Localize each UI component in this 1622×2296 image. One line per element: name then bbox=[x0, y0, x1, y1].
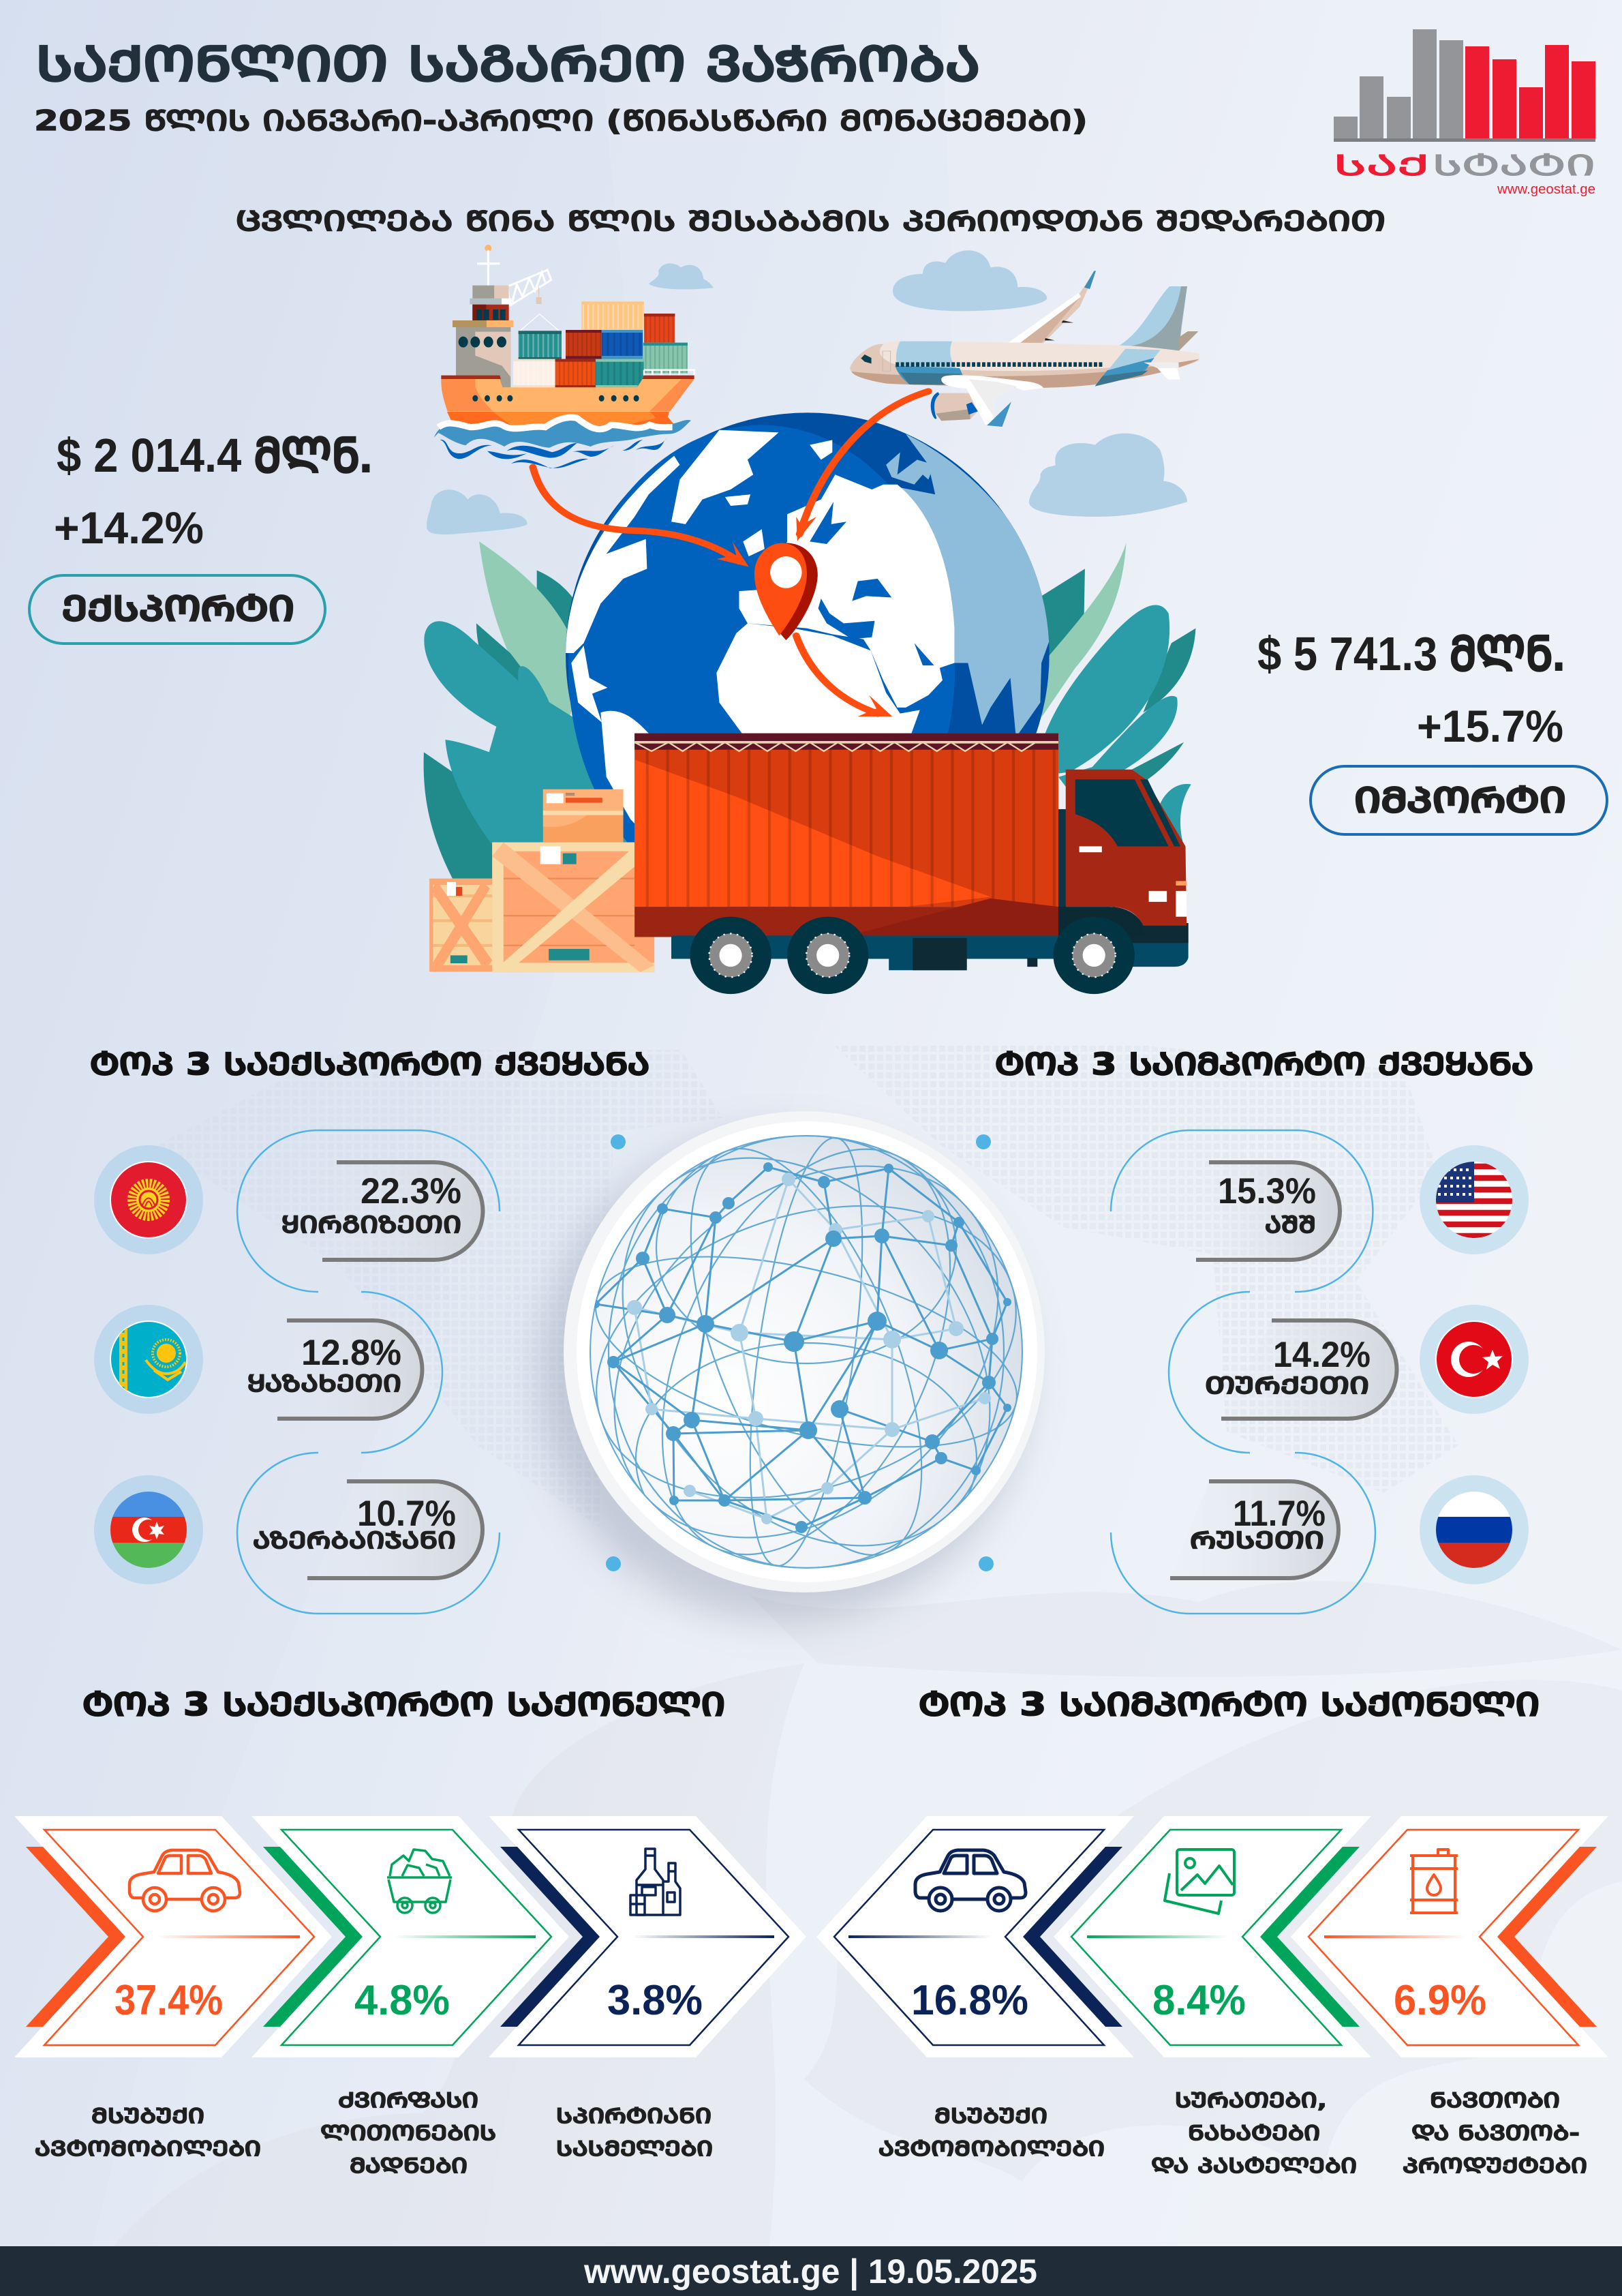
truck chassis bbox=[671, 923, 1189, 970]
icon: car bbox=[915, 1850, 1026, 1911]
location pin bbox=[754, 543, 818, 640]
label: precious metal ores bbox=[320, 2089, 496, 2178]
waves bbox=[434, 417, 691, 468]
flag: Azerbaijan bbox=[94, 1475, 203, 1584]
tail fin bbox=[1119, 286, 1198, 351]
arrow: pin to Africa bbox=[796, 636, 892, 716]
engine bbox=[932, 393, 978, 421]
label: spirits bbox=[556, 2104, 713, 2161]
subtitle: 2025 ᲬᲚᲘᲡ ᲘᲐᲜᲕᲐᲠᲘ-ᲐᲞᲠᲘᲚᲘ (ᲬᲘᲜᲐᲡᲬᲐᲠᲘ ᲛᲝᲜᲐᲪᲔᲛᲔᲑᲘ) bbox=[34, 104, 1088, 137]
footer bbox=[0, 2246, 1622, 2296]
export change: +14.2% bbox=[54, 502, 204, 553]
illustration: airplane bbox=[850, 271, 1199, 427]
heading: top 3 export countries: ᲢᲝᲞ 3 ᲡᲐᲔᲥᲡᲞᲝᲠᲢᲝ ᲥᲕᲔᲧᲐᲜᲐ bbox=[90, 1047, 649, 1082]
label: passenger cars bbox=[878, 2104, 1105, 2161]
mast bbox=[477, 245, 500, 286]
flag: USA bbox=[1420, 1145, 1529, 1254]
label: passenger cars bbox=[35, 2104, 261, 2161]
connector outline bbox=[237, 1130, 500, 1292]
label: pictures, drawings and pastels: ᲜᲐᲮᲐᲢᲔᲑᲘ bbox=[1188, 2121, 1320, 2145]
truck bbox=[634, 734, 1189, 994]
fuselage bbox=[850, 342, 1199, 388]
label: pictures, drawings and pastels: ᲓᲐ ᲞᲐᲡᲢᲔᲚᲔᲑᲘ bbox=[1151, 2154, 1357, 2178]
logo wordmark gray: ᲡᲢᲐᲢᲘ bbox=[1433, 149, 1595, 182]
near wing bbox=[941, 375, 1043, 427]
label: spirits: ᲡᲞᲘᲠᲢᲘᲐᲜᲘ bbox=[556, 2104, 711, 2128]
title: ᲡᲐᲥᲝᲜᲚᲘᲗ ᲡᲐᲒᲐᲠᲔᲝ ᲕᲐᲭᲠᲝᲑᲐ bbox=[36, 36, 980, 92]
label: passenger cars: ᲐᲕᲢᲝᲛᲝᲑᲘᲚᲔᲑᲘ bbox=[35, 2137, 261, 2161]
label: passenger cars: ᲛᲡᲣᲑᲣᲥᲘ bbox=[91, 2104, 204, 2128]
import pill bbox=[1311, 766, 1607, 834]
label: oil and oil products: ᲜᲐᲕᲗᲝᲑᲘ bbox=[1430, 2089, 1560, 2113]
label: pictures, drawings and pastels bbox=[1151, 2089, 1357, 2178]
light-blue land in shade bbox=[898, 434, 1054, 738]
export value: $ 2 014.4 ᲛᲚᲜ. bbox=[57, 429, 372, 482]
country panel: Turkey bbox=[1169, 1292, 1529, 1453]
label: oil and oil products: ᲓᲐ ᲜᲐᲕᲗᲝᲑ- bbox=[1411, 2121, 1580, 2145]
sphere shadow bbox=[538, 1132, 1029, 1622]
share: 16.8% bbox=[911, 1977, 1028, 2024]
chevron: import petroleum bbox=[1291, 1816, 1608, 2057]
heading: top 3 import countries: ᲢᲝᲞ 3 ᲡᲐᲘᲛᲞᲝᲠᲢᲝ ᲥᲕᲔᲧᲐᲜᲐ bbox=[995, 1047, 1533, 1082]
central network sphere bbox=[538, 1085, 1071, 1622]
containers bbox=[513, 301, 694, 387]
arrow: ship to pin bbox=[533, 467, 749, 567]
export pill bbox=[29, 575, 325, 644]
label: oil and oil products: ᲞᲠᲝᲓᲣᲥᲢᲔᲑᲘ bbox=[1403, 2154, 1587, 2178]
label: passenger cars: ᲛᲡᲣᲑᲣᲥᲘ bbox=[934, 2104, 1047, 2128]
country panel: Kazakhstan bbox=[94, 1292, 442, 1453]
label: passenger cars: ᲐᲕᲢᲝᲛᲝᲑᲘᲚᲔᲑᲘ bbox=[878, 2137, 1105, 2161]
logo bars bbox=[1334, 29, 1595, 142]
heading: top 3 import goods: ᲢᲝᲞ 3 ᲡᲐᲘᲛᲞᲝᲠᲢᲝ ᲡᲐᲥᲝᲜᲔᲚᲘ bbox=[919, 1686, 1540, 1723]
flag: Kazakhstan bbox=[94, 1305, 203, 1414]
label: spirits: ᲡᲐᲡᲛᲔᲚᲔᲑᲘ bbox=[556, 2137, 713, 2161]
country name: ᲧᲘᲠᲒᲘᲖᲔᲗᲘ bbox=[281, 1211, 461, 1239]
decorative dots bbox=[606, 1134, 994, 1571]
label: precious metal ores: ᲚᲘᲗᲝᲜᲔᲑᲘᲡ bbox=[320, 2121, 496, 2145]
country name: ᲐᲖᲔᲠᲑᲐᲘᲯᲐᲜᲘ bbox=[253, 1527, 456, 1554]
icon: oil barrel bbox=[1410, 1849, 1458, 1913]
icon: picture frames bbox=[1165, 1849, 1234, 1914]
share: 11.7% bbox=[1233, 1494, 1326, 1534]
truck cab bbox=[1058, 770, 1187, 935]
arrow: plane to pin bbox=[796, 391, 928, 541]
share: 15.3% bbox=[1218, 1171, 1316, 1211]
import value: $ 5 741.3 ᲛᲚᲜ. bbox=[1257, 627, 1565, 680]
section subtitle: ᲪᲕᲚᲘᲚᲔᲑᲐ ᲬᲘᲜᲐ ᲬᲚᲘᲡ ᲨᲔᲡᲐᲑᲐᲛᲘᲡ ᲞᲔᲠᲘᲝᲓᲗᲐᲜ ᲨᲔᲓᲐᲠᲔᲑᲘᲗ bbox=[236, 206, 1386, 237]
far wing bbox=[1008, 271, 1096, 343]
value block bbox=[1221, 1320, 1397, 1419]
connector outline bbox=[1169, 1292, 1250, 1453]
crane bbox=[508, 270, 559, 331]
chevron: export ores bbox=[251, 1816, 569, 2057]
icon: ore cart bbox=[387, 1849, 452, 1913]
seas bbox=[818, 579, 891, 639]
land white bbox=[671, 430, 779, 524]
truck wheels bbox=[690, 917, 1135, 994]
country panel: Azerbaijan bbox=[94, 1453, 500, 1614]
leaves bbox=[424, 541, 1195, 881]
value block bbox=[322, 1162, 483, 1260]
icon: bottles bbox=[630, 1849, 680, 1915]
country name: ᲗᲣᲠᲥᲔᲗᲘ bbox=[1205, 1372, 1369, 1400]
big crate bbox=[492, 843, 654, 972]
country name: ᲐᲨᲨ bbox=[1265, 1211, 1316, 1239]
chevron: export cars bbox=[14, 1816, 332, 2057]
small crate bbox=[429, 879, 492, 971]
country name: ᲠᲣᲡᲔᲗᲘ bbox=[1190, 1527, 1324, 1554]
label: oil and oil products bbox=[1403, 2089, 1587, 2178]
connector outline bbox=[1111, 1130, 1373, 1292]
share: 12.8% bbox=[301, 1333, 401, 1373]
share: 10.7% bbox=[357, 1494, 456, 1534]
value block bbox=[1196, 1162, 1340, 1260]
share: 14.2% bbox=[1273, 1335, 1371, 1375]
footer: www.geostat.ge | 19.05.2025 bbox=[583, 2252, 1037, 2291]
truck container bbox=[634, 734, 1058, 937]
chevron: import pictures bbox=[1054, 1816, 1371, 2057]
connector outline bbox=[361, 1292, 442, 1453]
connector outline bbox=[237, 1453, 500, 1614]
chevron: export spirits bbox=[489, 1816, 806, 2057]
import pill: ᲘᲛᲞᲝᲠᲢᲘ bbox=[1354, 781, 1566, 820]
globe bbox=[566, 412, 1054, 911]
share: 37.4% bbox=[114, 1977, 223, 2024]
share: 3.8% bbox=[607, 1977, 703, 2024]
value block bbox=[307, 1481, 483, 1578]
illustration: globe, ship, plane, truck bbox=[424, 250, 1195, 994]
export pill: ᲔᲥᲡᲞᲝᲠᲢᲘ bbox=[62, 589, 294, 629]
country panel: Russia bbox=[1111, 1453, 1529, 1614]
hull bbox=[441, 376, 694, 427]
sphere network bbox=[590, 1135, 1023, 1569]
value block bbox=[277, 1320, 423, 1419]
label: precious metal ores: ᲫᲕᲘᲠᲤᲐᲡᲘ bbox=[338, 2089, 478, 2113]
logo wordmark red: ᲡᲐᲥ bbox=[1334, 149, 1429, 182]
flag: Russia bbox=[1420, 1475, 1529, 1584]
heading: top 3 export goods: ᲢᲝᲞ 3 ᲡᲐᲔᲥᲡᲞᲝᲠᲢᲝ ᲡᲐᲥᲝᲜᲔᲚᲘ bbox=[82, 1686, 725, 1723]
share: 6.9% bbox=[1394, 1977, 1486, 2024]
value block bbox=[1170, 1481, 1338, 1578]
share: 4.8% bbox=[354, 1977, 450, 2024]
logo: Geostat bbox=[1334, 29, 1595, 197]
label: precious metal ores: ᲛᲐᲓᲜᲔᲑᲘ bbox=[350, 2154, 468, 2178]
share: 22.3% bbox=[361, 1171, 461, 1211]
import change: +15.7% bbox=[1417, 701, 1563, 751]
country panel: USA bbox=[1111, 1130, 1529, 1292]
logo url: www.geostat.ge bbox=[1497, 182, 1595, 197]
flag: Turkey bbox=[1420, 1305, 1529, 1414]
arrows bbox=[533, 391, 928, 716]
illustration: cargo ship bbox=[434, 245, 694, 468]
sphere body bbox=[590, 1135, 1023, 1569]
box bbox=[543, 789, 624, 843]
superstructure bbox=[453, 286, 513, 387]
connector outline bbox=[1111, 1453, 1375, 1614]
crates bbox=[429, 789, 654, 972]
flag: Kyrgyzstan bbox=[94, 1145, 203, 1254]
share: 8.4% bbox=[1152, 1977, 1246, 2024]
sphere rim bbox=[564, 1111, 1045, 1592]
label: pictures, drawings and pastels: ᲡᲣᲠᲐᲗᲔᲑᲘ, bbox=[1175, 2089, 1327, 2113]
country panel: Kyrgyzstan bbox=[94, 1130, 500, 1292]
chevron: import cars bbox=[816, 1816, 1134, 2057]
country name: ᲧᲐᲖᲐᲮᲔᲗᲘ bbox=[247, 1370, 401, 1398]
clouds bbox=[427, 250, 1187, 534]
icon: car bbox=[129, 1850, 240, 1911]
